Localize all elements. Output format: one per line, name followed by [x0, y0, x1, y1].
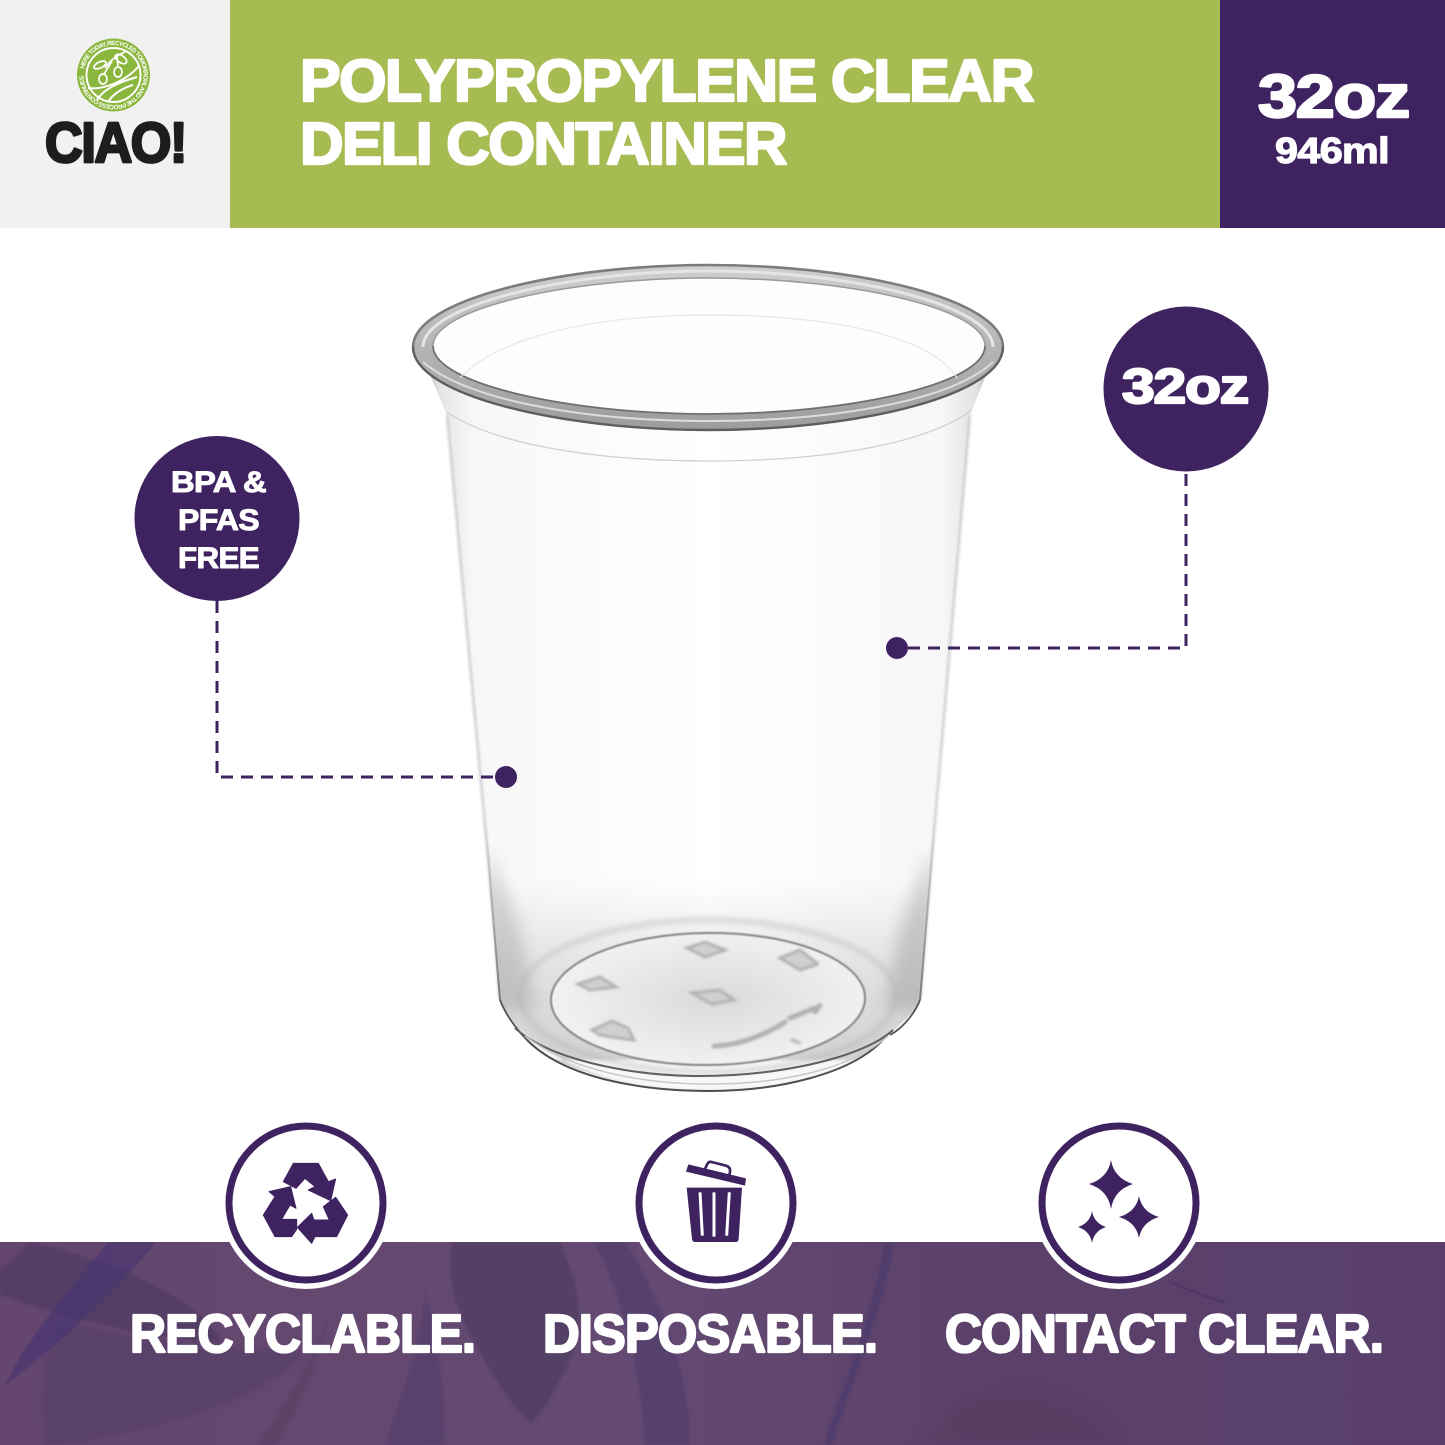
callout: BPA and PFAS free badge: BPA &: [171, 466, 266, 499]
brand name: CIAO!: [45, 111, 186, 175]
size text: 946ml: [1275, 130, 1389, 171]
callout: BPA and PFAS free badge: FREE: [178, 542, 259, 575]
title: [300, 48, 1034, 177]
container base: [500, 920, 920, 1091]
panel: title banner: [230, 0, 1220, 228]
callout: BPA and PFAS free badge: PFAS: [178, 504, 259, 537]
container side edges: [447, 415, 970, 1000]
icon: recycle: [220, 1117, 392, 1289]
leader dot: [886, 637, 908, 659]
panel: size block: [1220, 0, 1445, 228]
callout: BPA and PFAS free badge: [134, 436, 517, 788]
feature label: disposable: DISPOSABLE.: [543, 1304, 877, 1364]
feature label: contact clear: CONTACT CLEAR.: [945, 1304, 1383, 1364]
title: DELI CONTAINER: [300, 111, 787, 177]
container rim: [413, 265, 1003, 461]
icon: sparkles: [1033, 1117, 1205, 1289]
title: POLYPROPYLENE CLEAR: [300, 48, 1034, 114]
leader line: [217, 601, 495, 777]
embossed base markings: [578, 942, 820, 1046]
leader dot: [495, 766, 517, 788]
icon: round olive logo seal: HERE TODAY, RECYCLED TOMORROW, AND THE PROCESS CONTINUES.: [79, 40, 148, 110]
panel: logo header block: [0, 0, 230, 228]
callout: 32oz badge: [886, 306, 1268, 659]
leaf background: [0, 1242, 1225, 1445]
icon: trash can: [630, 1117, 802, 1289]
feature label: recyclable: RECYCLABLE.: [130, 1304, 475, 1364]
callout: 32oz badge: 32oz: [1122, 360, 1248, 414]
panel: bottom feature band: [0, 1242, 1445, 1445]
size text: [1258, 63, 1409, 171]
container body: [428, 370, 988, 1100]
size text: 32oz: [1258, 63, 1409, 130]
leader line: [908, 471, 1186, 648]
illustration: clear deli container: [413, 265, 1003, 1100]
